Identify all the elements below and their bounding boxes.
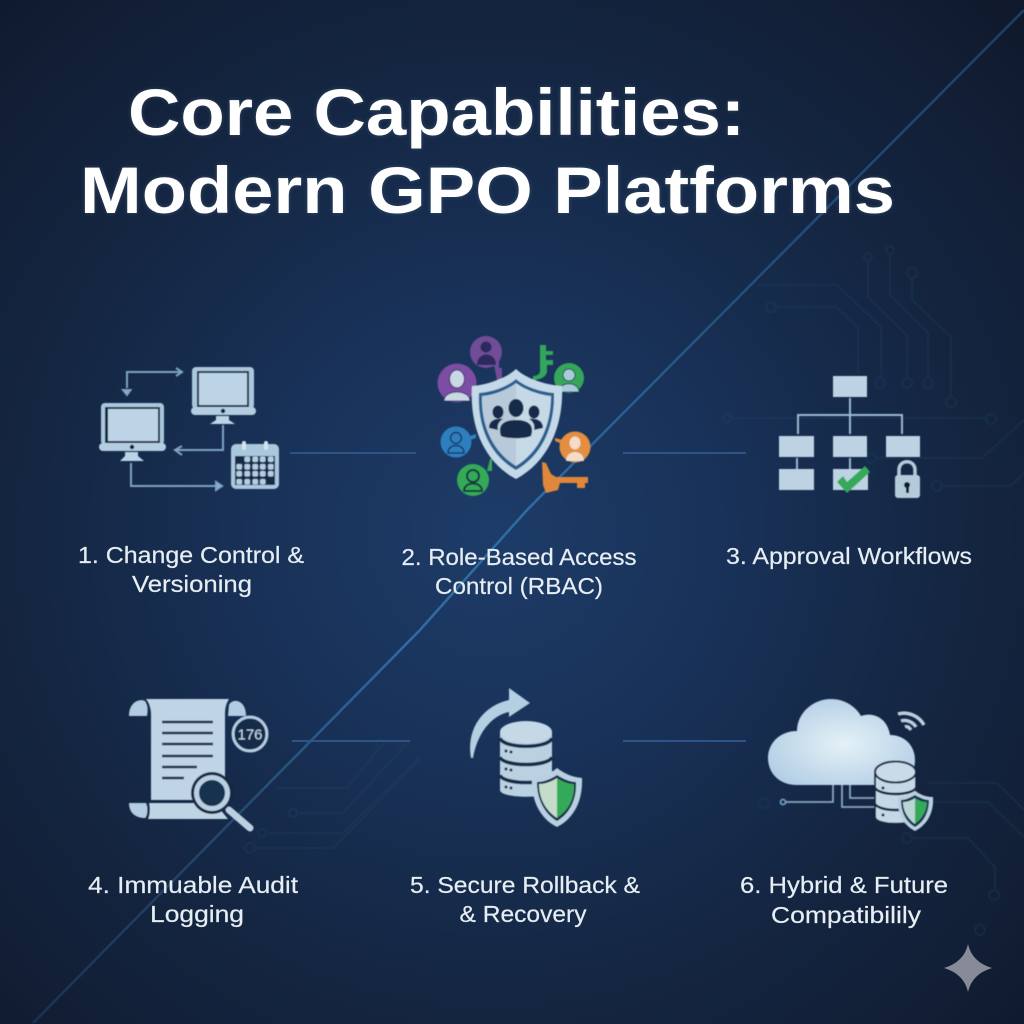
wifi signal [898,713,924,730]
monitor: lower left [99,403,166,461]
cloud [768,699,915,785]
shield: green small [898,791,933,831]
label: immuable audit: 4. Immuable Audit [88,872,299,898]
label: approval workflows: 3. Approval Workflows [726,543,972,569]
icon: secure rollback database [470,688,582,827]
label: compatibility: Compatibilily [771,902,922,928]
icon: hybrid cloud with database [768,699,933,831]
user: purple small [470,336,502,380]
user: green upper [554,363,584,393]
database [875,762,916,824]
label: logging: Logging [150,901,244,927]
icon: RBAC shield with users and keys [438,336,590,496]
label: change control: 1. Change Control & [78,542,304,568]
scroll text lines [162,722,213,778]
calendar [231,441,279,489]
title: Core Capabilities: [128,75,745,149]
title [80,75,895,227]
label: role-based access: 2. Role-Based Access [402,544,636,570]
user: green lower [457,459,492,496]
label: control RBAC: Control (RBAC) [435,573,603,599]
user: blue [440,426,476,458]
arrows between devices [123,368,223,490]
green check mark [837,466,870,493]
monitor: upper right [191,367,256,424]
icon: change control monitors and calendar [99,367,279,490]
user: orange [555,432,590,462]
title: Modern GPO Platforms [80,153,895,227]
label: hybrid and future: 6. Hybrid & Future [740,872,948,898]
scroll body [129,699,246,819]
key: green [533,345,553,380]
label: secure rollback: 5. Secure Rollback & [410,872,640,898]
shield: green [532,768,582,827]
connector lines [290,453,746,741]
icon: sparkle star [944,944,992,992]
network lines [780,785,878,807]
key: orange [542,462,588,493]
database [500,721,552,797]
curved arrow [470,688,530,758]
label: versioning: Versioning [132,571,252,597]
version badge: 176 [237,726,263,744]
circuit background pattern [245,246,1024,935]
label: recovery: & Recovery [460,901,587,927]
icon: approval workflow chart [779,376,920,498]
padlock [895,462,920,498]
magnifier [191,772,250,828]
shield [472,369,562,479]
icon: audit log scroll with magnifier [129,699,267,828]
user: purple large [438,364,476,402]
